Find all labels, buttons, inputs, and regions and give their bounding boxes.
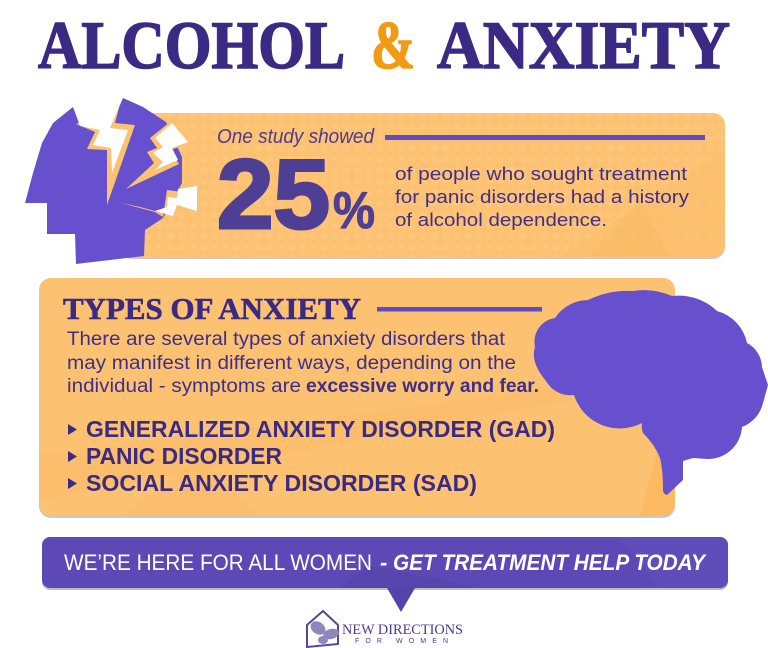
icon: brain — [534, 290, 768, 495]
text: banner message: - — [380, 550, 387, 575]
text: statistic description: for panic disorders had a history — [395, 186, 690, 207]
list: anxiety types: SOCIAL ANXIETY DISORDER (SAD) — [86, 470, 477, 496]
stat: 25 percent: 25 — [217, 139, 330, 249]
logo: new directions for women: NEW DIRECTIONS — [342, 622, 463, 638]
text: one study showed: One study showed — [217, 126, 375, 148]
text: description: excessive worry and fear. — [306, 376, 539, 397]
icon: house with butterfly — [307, 611, 340, 647]
text: statistic description — [395, 163, 690, 230]
text: statistic description: of alcohol dependence. — [395, 209, 607, 230]
text: description: may manifest in different ways, depending on the — [67, 353, 516, 374]
title — [38, 7, 730, 83]
text: banner message — [64, 550, 707, 575]
text: description: individual - symptoms are — [67, 376, 301, 397]
text: statistic description: of people who sought treatment — [395, 163, 687, 184]
title: & — [371, 7, 415, 83]
panel: types of anxiety — [39, 278, 675, 518]
list: anxiety types: GENERALIZED ANXIETY DISORDER (GAD) — [86, 416, 555, 442]
logo: new directions for women — [307, 611, 463, 647]
text: description: There are several types of anxiety disorders that — [67, 329, 506, 350]
panel: statistic — [25, 88, 725, 264]
text: banner message: WE’RE HERE FOR ALL WOMEN — [64, 550, 372, 575]
heading: types of anxiety: TYPES OF ANXIETY — [63, 291, 361, 326]
stat: 25 percent: % — [333, 182, 375, 240]
title: ANXIETY — [437, 7, 730, 83]
list: anxiety types — [68, 416, 555, 496]
title: ALCOHOL — [38, 7, 345, 83]
text: banner message: GET TREATMENT HELP TODAY — [393, 550, 707, 575]
icon: head with lightning bolts — [25, 88, 197, 264]
list: anxiety types: PANIC DISORDER — [86, 443, 282, 469]
stat: 25 percent — [217, 139, 375, 249]
text: description — [67, 329, 539, 397]
logo: new directions for women: FOR WOMEN — [355, 638, 448, 645]
banner: call to action — [42, 537, 728, 612]
